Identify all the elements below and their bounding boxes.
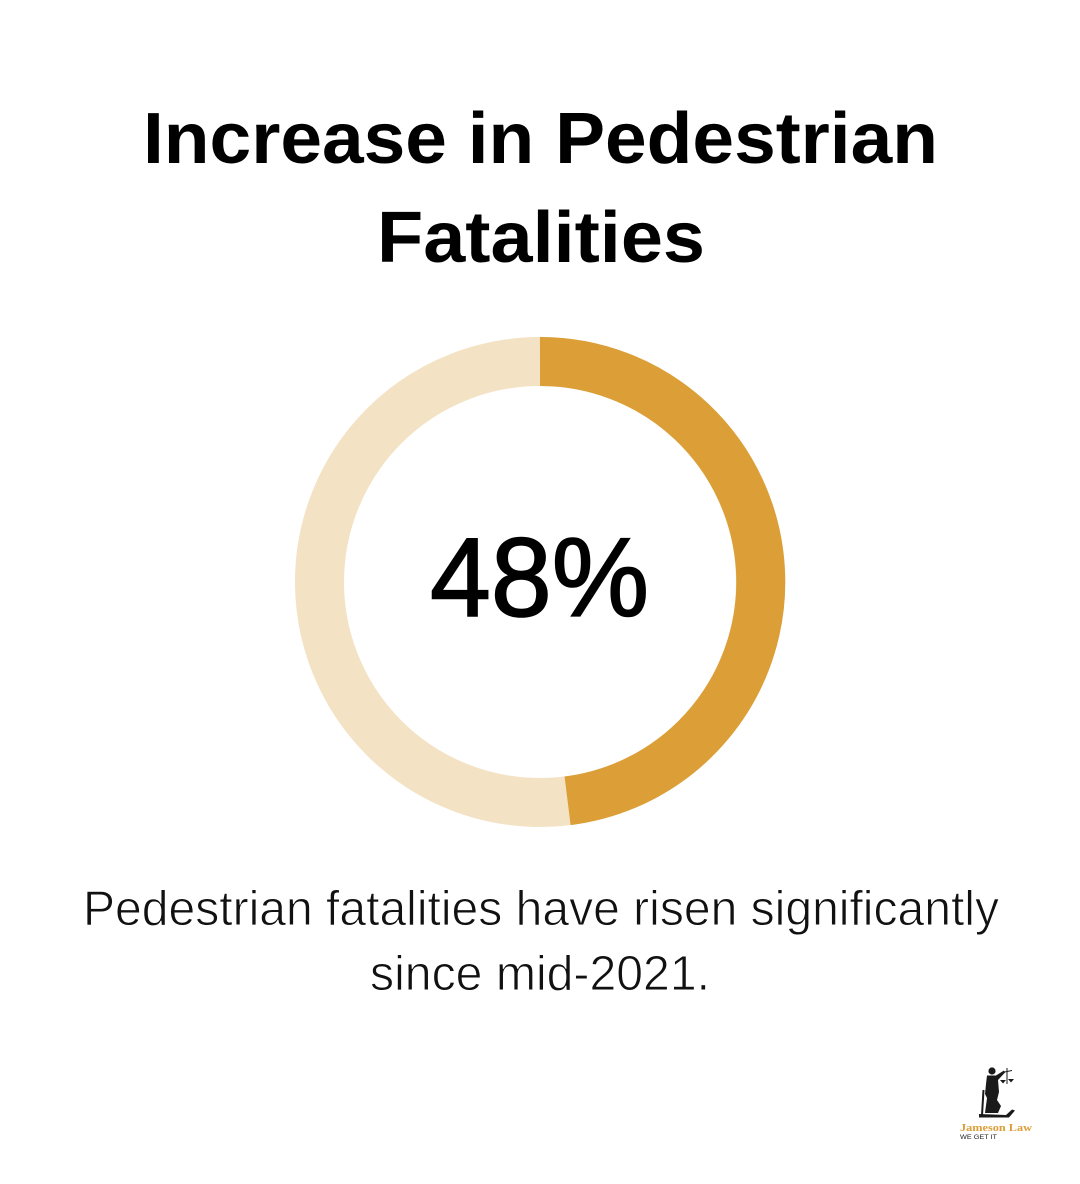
logo name: Jameson Law: [960, 1122, 1032, 1134]
logo: Jameson Law: [960, 1067, 1032, 1141]
icon: lady justice: [979, 1067, 1015, 1118]
description text: [83, 882, 999, 1001]
title: [143, 99, 938, 278]
description text: Pedestrian fatalities have risen significantly: [83, 882, 999, 936]
title: Increase in Pedestrian: [143, 99, 938, 179]
percentage value: 48%: [430, 515, 649, 640]
title: Fatalities: [377, 198, 705, 278]
donut chart: 48%: [320, 361, 761, 802]
description text: since mid-2021.: [370, 947, 710, 1001]
logo tagline: WE GET IT: [960, 1134, 997, 1141]
